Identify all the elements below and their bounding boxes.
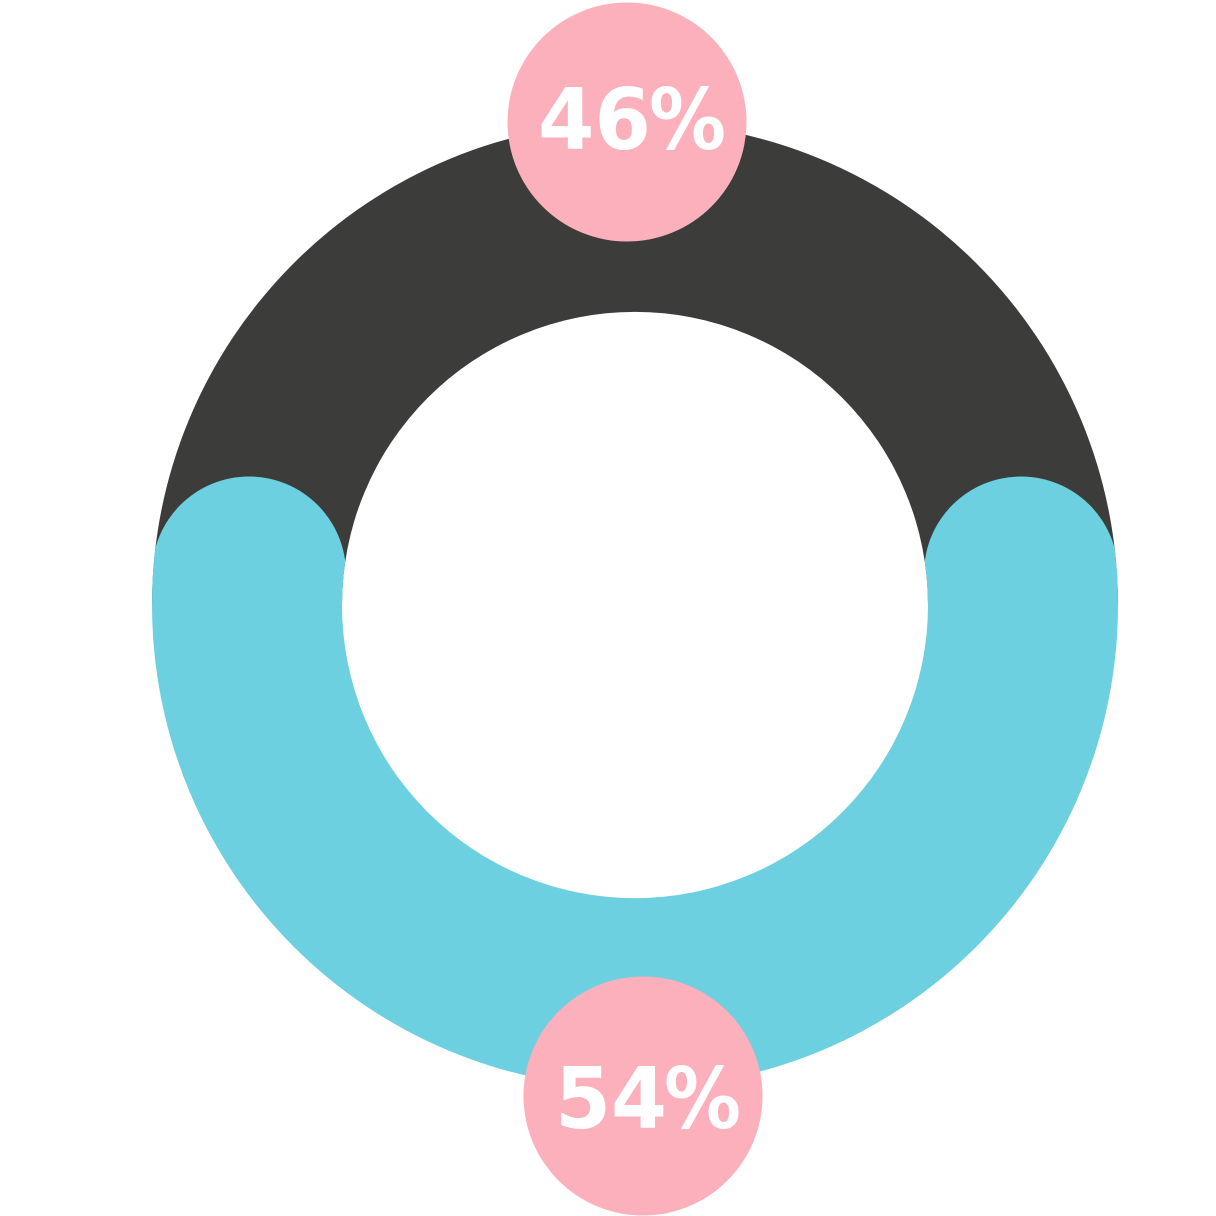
badge: 54% bbox=[524, 976, 762, 1216]
badge: 54%: % bbox=[664, 1050, 741, 1149]
badge: 46%: 46 bbox=[538, 71, 651, 170]
donut chart bbox=[152, 217, 1118, 993]
teal ring segment: 54% bbox=[152, 476, 1118, 993]
badge: 54%: 54 bbox=[555, 1050, 667, 1149]
dark ring segment: 46% bbox=[247, 217, 1023, 605]
badge: 46%: % bbox=[649, 71, 726, 170]
badge: 46% bbox=[508, 2, 746, 242]
